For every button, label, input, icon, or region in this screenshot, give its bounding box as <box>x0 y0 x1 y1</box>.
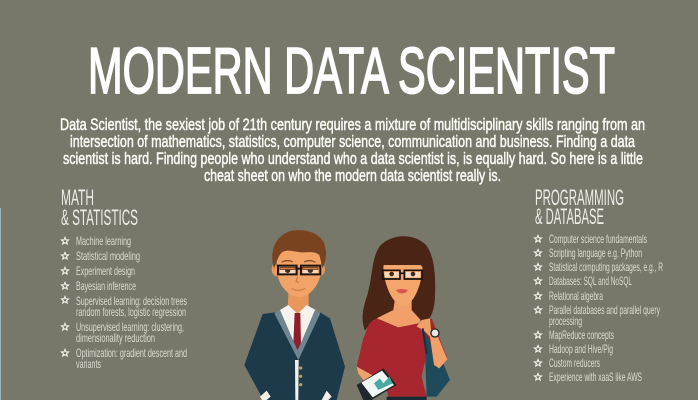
hair <box>272 230 326 268</box>
heading: math and statistics <box>61 185 138 230</box>
neck and shoulders <box>377 298 421 327</box>
handbag <box>423 330 450 397</box>
tablet chart <box>374 377 393 390</box>
skill list: programming: Hadoop and Hive/Pig <box>549 342 613 356</box>
neck <box>287 288 309 330</box>
tie <box>293 313 301 352</box>
red top <box>357 318 427 397</box>
skill list: math: variants <box>76 357 101 371</box>
tablet <box>357 368 397 400</box>
star bullets: programming <box>534 235 542 380</box>
skill list: math: Unsupervised learning: clustering, <box>76 320 184 334</box>
skill list: math: Statistical modeling <box>76 249 140 263</box>
heading: programming and database <box>535 185 624 229</box>
skill list: programming: Custom reducers <box>549 356 600 370</box>
illustration: female data scientist <box>357 236 450 400</box>
skill list: math: Experiment design <box>76 264 135 278</box>
skill list: math: random forests, logistic regression <box>76 305 186 319</box>
panel: programming and database <box>534 185 663 384</box>
skill list: programming: processing <box>549 314 582 328</box>
ears <box>272 265 325 276</box>
shirt <box>280 305 316 353</box>
skill list: math: Bayesian inference <box>76 279 136 293</box>
skill list: math: Machine learning <box>76 234 131 248</box>
hair back <box>363 236 435 331</box>
illustration: male data scientist <box>244 230 345 400</box>
fringe <box>383 245 424 268</box>
eyelids and brows <box>280 261 318 269</box>
nose and mouth <box>292 277 305 290</box>
buttons <box>299 366 302 386</box>
heading: math and statistics: MATH <box>61 185 94 210</box>
nose and lips <box>396 289 408 293</box>
face <box>277 248 321 297</box>
skirt <box>387 397 427 400</box>
eyes <box>385 272 420 277</box>
face <box>383 265 423 306</box>
skill list: math <box>76 234 187 371</box>
skill list: math: Supervised learning: decision trees <box>76 294 187 308</box>
shirt placket and cuffs <box>260 360 332 400</box>
intro paragraph <box>60 115 645 185</box>
red sleeve behind arm <box>420 318 447 360</box>
glasses <box>278 266 320 274</box>
skill list: programming <box>549 232 663 384</box>
skill list: programming: Relational algebra <box>549 289 603 303</box>
skill list: programming: MapReduce concepts <box>549 328 614 342</box>
bag strap <box>423 328 427 353</box>
right arm <box>417 318 447 368</box>
star bullets: math <box>62 237 68 356</box>
skill list: math: Optimization: gradient descent and <box>76 346 187 360</box>
glasses <box>383 270 422 279</box>
heading: math and statistics: & STATISTICS <box>61 205 138 230</box>
forearm <box>357 367 383 394</box>
panel: math and statistics <box>61 185 187 371</box>
intro paragraph: cheat sheet on who the modern data scientist really is. <box>204 166 501 185</box>
heading: programming and database: & DATABASE <box>535 204 604 229</box>
watch <box>431 329 439 337</box>
lapel trim <box>274 310 320 360</box>
jacket <box>244 312 345 400</box>
eyes <box>280 267 318 273</box>
skill list: math: dimensionality reduction <box>76 331 155 345</box>
